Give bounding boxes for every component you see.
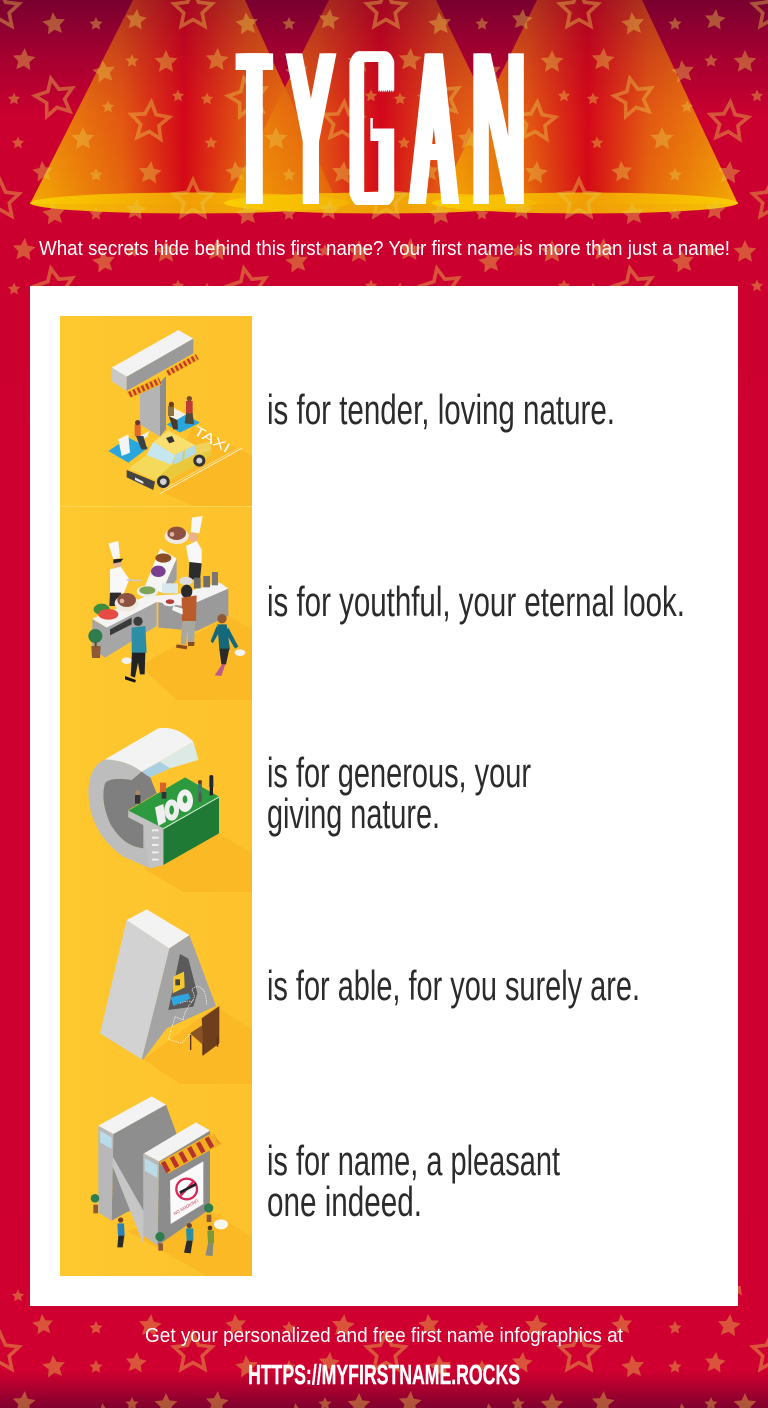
title: A [414,7,453,251]
icon: letter T with taxi [108,330,252,506]
text: G phrase: is for generous, your [267,749,531,796]
text: N phrase [267,1137,560,1225]
footer prompt: Get your personalized and free first name infographics at [145,1325,623,1347]
spotlight floor ellipses [30,192,738,214]
text: G phrase [267,749,531,837]
text: N phrase: one indeed. [267,1178,422,1225]
icon: letter G with green platform [88,728,252,892]
text: G phrase: giving nature. [267,790,440,837]
icon: buffet with chefs [88,516,252,700]
star pattern top [0,0,768,300]
spotlights [30,0,738,204]
icon: letter N with no smoking sign: NO SMOKING [173,1198,200,1216]
star pattern bottom [0,1286,768,1408]
icon: letter N with no smoking sign [91,1096,252,1276]
footer url: HTTPS://MYFIRSTNAME.ROCKS [248,1359,520,1390]
text: N phrase: is for name, a pleasant [267,1137,560,1184]
icon: letter A with chair [100,909,252,1084]
subtitle: What secrets hide behind this first name? Your first name is more than just a name! [39,238,730,260]
title: T [240,7,267,251]
title: G [353,7,390,251]
title [236,7,525,251]
yellow illustration column [60,316,252,1276]
title: N [472,7,525,251]
title: Y [289,7,333,251]
text: T phrase: is for tender, loving nature. [267,386,615,433]
icon: letter T with taxi: TAXI [191,423,233,456]
white content panel [30,286,738,1306]
